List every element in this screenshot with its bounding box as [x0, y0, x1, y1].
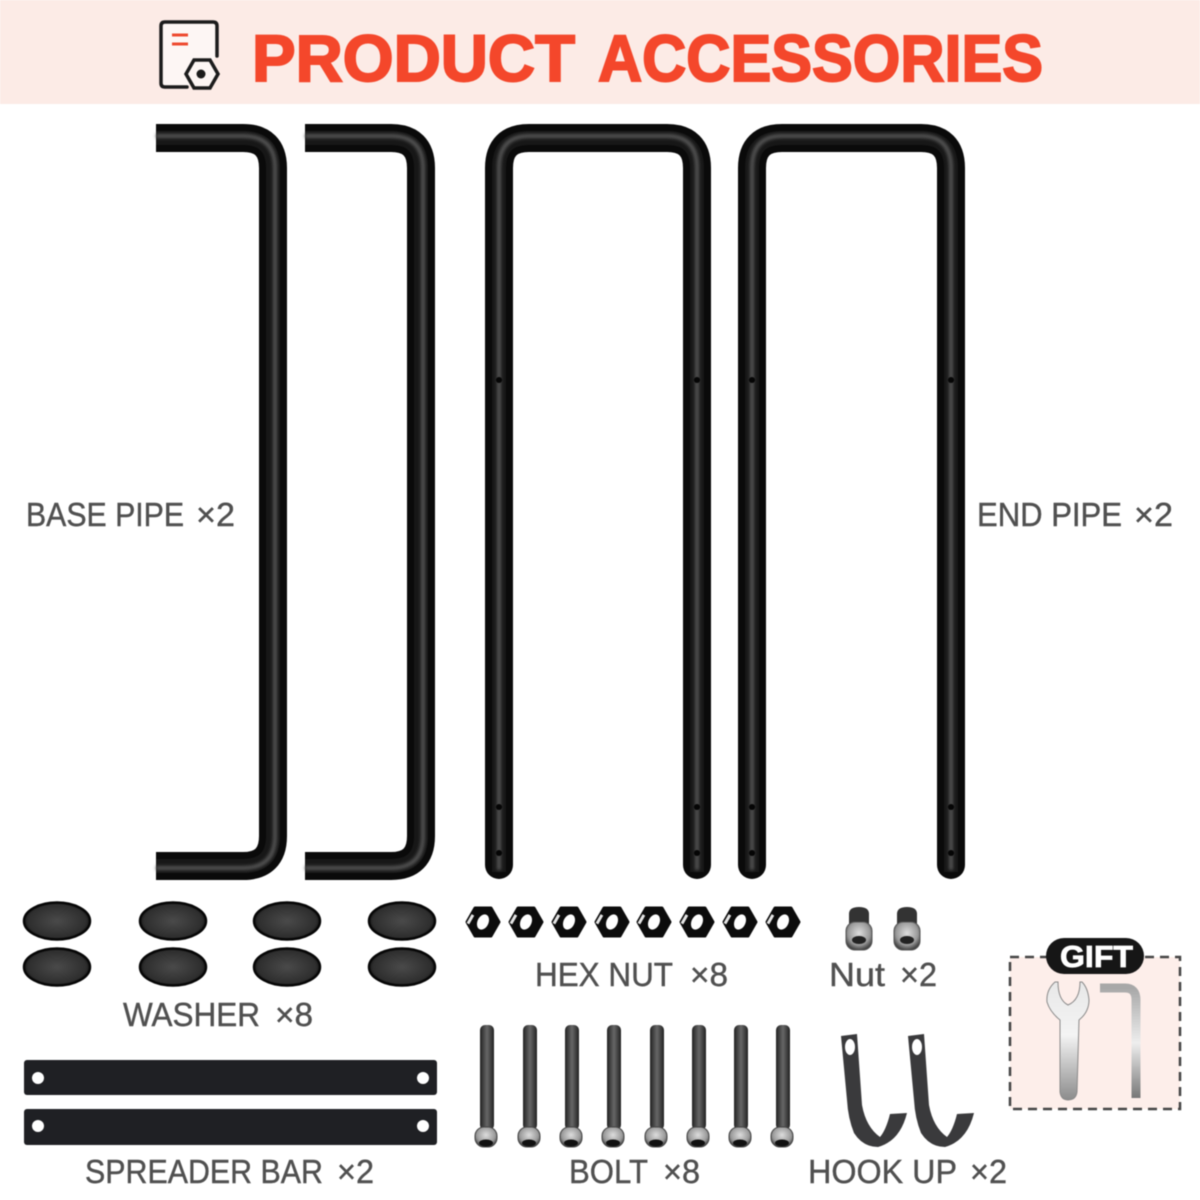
label: end pipe: END PIPE [977, 496, 1122, 533]
label: nut [829, 956, 937, 993]
title [252, 21, 1043, 95]
spreader bars [24, 1060, 437, 1145]
title: ACCESSORIES [598, 21, 1043, 95]
label: end pipe: ×2 [1134, 496, 1173, 533]
label: base pipe: ×2 [196, 496, 235, 533]
nuts [846, 907, 920, 950]
label: hex nut: HEX NUT [535, 956, 673, 993]
base pipe 2 [305, 136, 423, 868]
label: hook up: HOOK UP [808, 1153, 957, 1190]
end pipe 1 [496, 136, 700, 872]
label: washer: ×8 [275, 996, 313, 1033]
washers [24, 902, 435, 986]
hooks [841, 1034, 974, 1147]
label: washer: WASHER [123, 996, 260, 1033]
label: bolt: BOLT [569, 1153, 648, 1190]
label: hook up: ×2 [970, 1153, 1007, 1190]
header band [0, 0, 1200, 104]
gift panel [1010, 938, 1180, 1109]
label: base pipe: BASE PIPE [26, 496, 184, 533]
icon: wrench [1047, 982, 1089, 1100]
label: nut: Nut [829, 956, 885, 993]
label: bolt: ×8 [663, 1153, 700, 1190]
label: spreader bar: ×2 [337, 1153, 374, 1190]
icon: hex key [1100, 988, 1136, 1098]
label: bolt [569, 1153, 700, 1190]
title: PRODUCT [252, 21, 575, 95]
bolts [475, 1025, 793, 1147]
label: hex nut: ×8 [690, 956, 728, 993]
icon: document with hex nut [161, 22, 218, 88]
hex nuts [467, 908, 799, 936]
label: spreader bar: SPREADER BAR [85, 1153, 323, 1190]
gift badge: GIFT [1060, 939, 1133, 974]
end pipe 2 [749, 136, 954, 872]
label: nut: ×2 [900, 956, 937, 993]
base pipe 1 [156, 136, 275, 868]
